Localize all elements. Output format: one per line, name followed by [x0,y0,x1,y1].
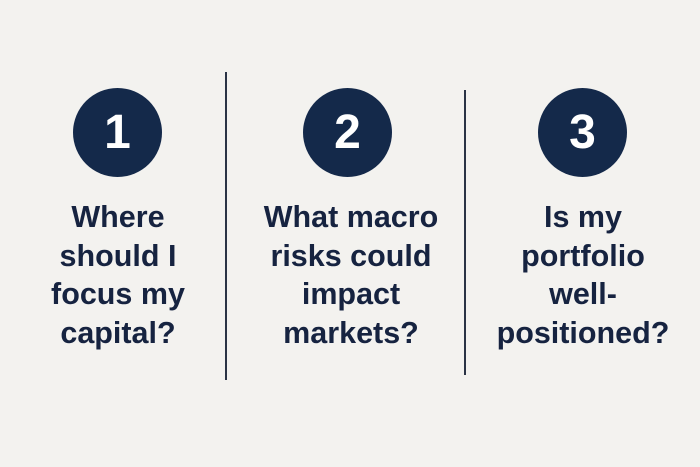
text: question 2: risks could [270,238,432,272]
text: question 3 [497,200,669,350]
text: question 3: well- [549,277,617,311]
text: question 1 [51,200,185,350]
icon: number 1 circle [73,88,162,177]
text: question 1: focus my [51,277,185,311]
icon: number 3 circle: 3 [569,106,596,159]
text: question 2: markets? [283,316,419,350]
divider 2 [464,90,466,375]
icon: number 1 circle: 1 [104,106,131,159]
text: question 2 [264,200,438,350]
text: question 2: impact [302,277,400,311]
text: question 1: capital? [60,316,176,350]
text: question 3: Is my [544,200,622,234]
icon: number 2 circle: 2 [334,106,361,159]
text: question 3: portfolio [521,238,645,272]
text: question 1: should I [60,238,176,272]
text: question 3: positioned? [497,316,669,350]
text: question 2: What macro [264,200,438,234]
icon: number 3 circle [538,88,627,177]
icon: number 2 circle [303,88,392,177]
divider 1 [225,72,227,380]
text: question 1: Where [71,200,165,234]
